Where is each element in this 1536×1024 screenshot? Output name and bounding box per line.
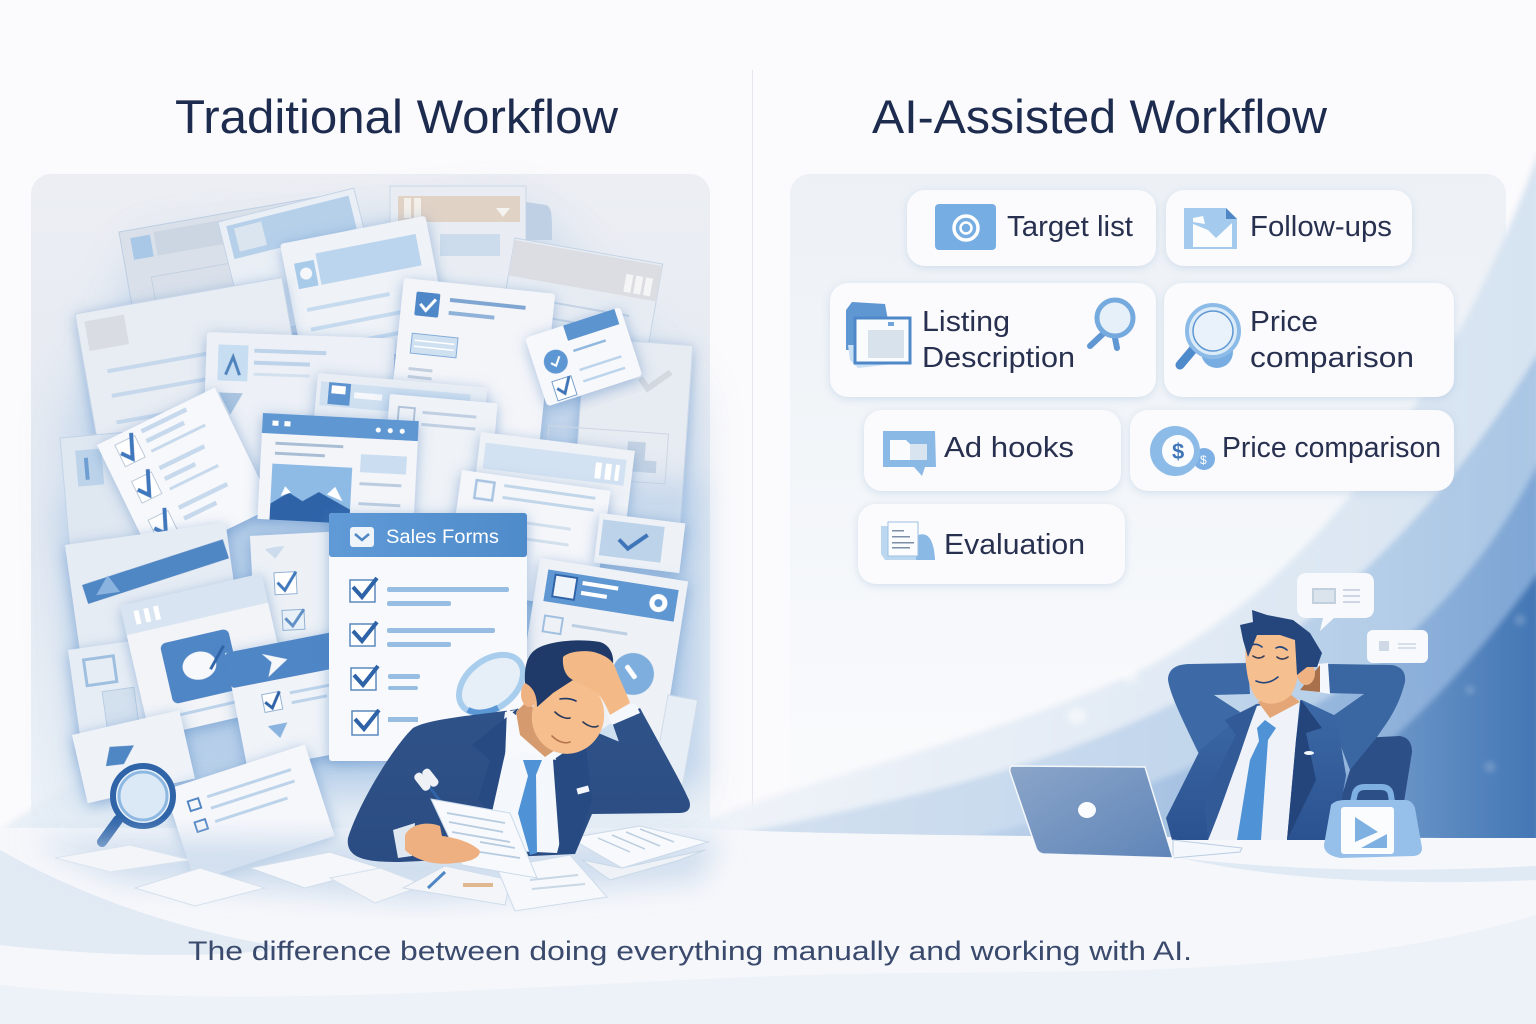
document: form with blue band [280, 216, 450, 372]
document: checklist tilted [97, 388, 273, 565]
shadow beneath papers [30, 838, 720, 900]
document: side left back [60, 431, 150, 558]
card: Target list: Target list [1007, 211, 1133, 243]
document: right tall sheet [542, 336, 693, 535]
gap glow between head and arm [590, 722, 627, 763]
icon: magnifier and coin [1180, 305, 1239, 368]
head [522, 669, 614, 763]
document: window strip [308, 373, 487, 507]
neck [1258, 690, 1300, 718]
card: Price comparison tall: comparison [1250, 342, 1414, 374]
card: Evaluation: Evaluation [944, 529, 1085, 561]
tie [1237, 720, 1276, 840]
briefcase [1324, 787, 1422, 858]
bottom wave left [0, 850, 290, 955]
document: lower-left stacked [68, 639, 163, 759]
card: Price comparison wide: Price comparison [1222, 432, 1441, 464]
icon: target [935, 204, 996, 250]
speech bubble: small [1367, 630, 1428, 663]
icon: dollar coins: $ [1200, 453, 1207, 467]
card: Follow-ups: Follow-ups [1250, 211, 1392, 243]
icon: small magnifier [1090, 300, 1133, 348]
icon: speech folder [883, 431, 936, 476]
table surface [0, 828, 1536, 1024]
paper in hand [431, 799, 537, 878]
face details [552, 699, 598, 743]
hand behind head [1300, 665, 1320, 692]
card: Listing Description: Description [922, 342, 1075, 374]
form: Sales Forms [329, 513, 527, 761]
document: grey top-left [119, 191, 373, 360]
document: small form [380, 394, 498, 523]
document: lower-left sheet [65, 522, 241, 654]
head [1245, 632, 1299, 704]
title: traditional workflow: Traditional Workflow [175, 90, 619, 143]
shirt [1208, 700, 1300, 840]
icon: large magnifier [102, 766, 173, 842]
icon: form header [350, 527, 374, 547]
document: browser window [257, 413, 419, 527]
card: Price comparison tall [1164, 283, 1454, 397]
document: small check card [594, 513, 685, 573]
document: sheet with blue square icon [120, 573, 292, 738]
card: Price comparison tall: Price [1250, 306, 1318, 338]
document: lower sheet [165, 745, 334, 881]
card: Evaluation [858, 504, 1125, 584]
soft blue glow behind pile [70, 210, 690, 800]
form heading: Sales Forms [386, 527, 499, 548]
card: Ad hooks: Ad hooks [944, 432, 1074, 464]
document: lower-left small [72, 710, 195, 803]
right arm [1328, 664, 1405, 770]
icon: folded page [1184, 208, 1237, 249]
blue background waves [0, 150, 1536, 850]
panel: AI-assisted backdrop [790, 174, 1506, 844]
icon: dollar coins [1150, 426, 1215, 476]
shirt [490, 708, 580, 853]
title: AI-assisted workflow: AI-Assisted Workflow [872, 90, 1328, 143]
card: Listing Description [830, 283, 1156, 397]
document: sheet with triangle icon [201, 332, 395, 508]
document: large left sheet [75, 278, 313, 491]
speech bubble: large [1297, 573, 1374, 631]
pocket square [576, 786, 590, 794]
left arm [1168, 663, 1250, 756]
table shadow right [1180, 858, 1536, 882]
hand left [405, 824, 480, 864]
icon: small magnifier behind person [448, 643, 534, 725]
card: checklist small [525, 307, 642, 406]
icon: stacked pages [846, 302, 910, 368]
document: blue header back [218, 188, 383, 338]
hair [1240, 610, 1322, 675]
scattered papers [55, 826, 708, 911]
caption: The difference between doing everything manually and working with AI. [188, 936, 1192, 966]
torso [1166, 700, 1346, 840]
icon: documents [881, 522, 935, 560]
hand on head [563, 651, 630, 715]
suit body [348, 708, 690, 862]
forearm and cuff [607, 703, 640, 725]
document: mid-left check [250, 532, 337, 666]
document: tan header right [492, 238, 663, 392]
document: tan header [390, 186, 552, 316]
illustration: stressed worker [55, 640, 708, 911]
form checklist rows [350, 578, 509, 735]
document: blue header play sheet [225, 632, 358, 771]
center divider [752, 70, 753, 810]
pen [413, 767, 444, 806]
cuff left [393, 823, 415, 858]
laptop [1010, 766, 1242, 858]
face details [1252, 644, 1288, 683]
document: checklist sheet [388, 278, 555, 443]
bottom wave band [0, 915, 1536, 1024]
document: banded right [472, 432, 635, 520]
hair [525, 640, 613, 707]
card: Ad hooks [864, 410, 1121, 491]
card: Target list [907, 190, 1156, 266]
panel: traditional backdrop [31, 174, 710, 844]
ear [1297, 661, 1315, 685]
illustration: pile of documents [60, 186, 700, 881]
icon: dollar coins: $ [1172, 439, 1184, 464]
document: right form blue header [510, 558, 688, 769]
card: Follow-ups [1166, 190, 1412, 266]
lapels [1204, 704, 1257, 840]
illustration: relaxed worker [1010, 610, 1422, 858]
card: Price comparison wide [1130, 410, 1454, 491]
neck [516, 700, 558, 757]
pin [1304, 751, 1314, 755]
tie [518, 760, 542, 855]
card: Listing Description: Listing [922, 306, 1010, 338]
laptop logo [1078, 802, 1096, 818]
document: far-right sliver [652, 695, 698, 789]
mist between document layers [60, 480, 700, 780]
ear [521, 681, 537, 707]
cuff [1318, 663, 1330, 694]
collar [505, 708, 556, 760]
chair [1340, 736, 1412, 802]
lapel [472, 708, 518, 812]
document: small check lines [445, 470, 611, 610]
